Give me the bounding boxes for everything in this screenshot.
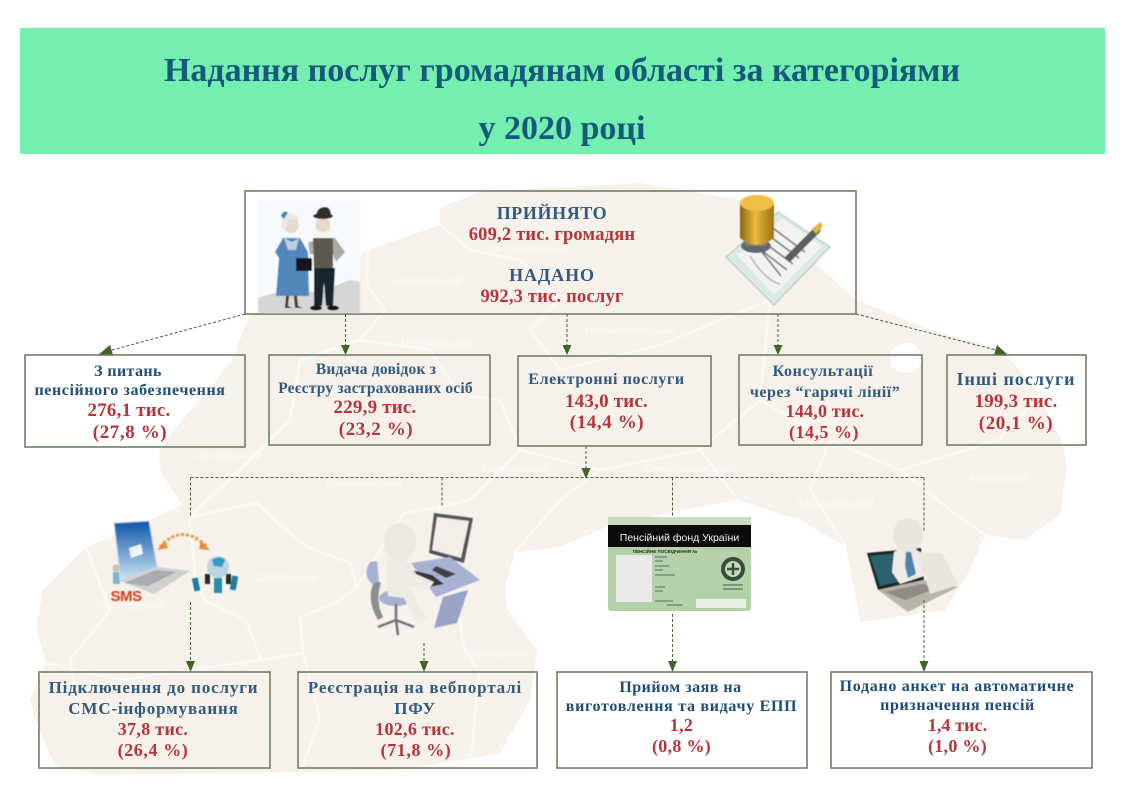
panel: SMS subscription: 37,8 тис. xyxy=(118,719,188,739)
panel: certificates xyxy=(269,355,490,445)
arrow: totals to certificates xyxy=(341,314,350,355)
panel: card applications xyxy=(557,672,807,768)
panel: card applications: (0,8 %) xyxy=(652,736,711,757)
panel: electronic services: (14,4 %) xyxy=(570,412,644,433)
title banner: у 2020 році xyxy=(479,110,645,147)
panel: hotlines xyxy=(739,355,922,445)
heading: accepted: ПРИЙНЯТО xyxy=(497,202,607,223)
panel: card applications: Прийом заяв на xyxy=(619,679,742,696)
arrow: totals to pension questions xyxy=(98,314,245,355)
arrow: totals to hotlines xyxy=(774,314,782,355)
accepted value: 609,2 тис. громадян xyxy=(469,225,635,245)
panel: electronic services: Електронні послуги xyxy=(528,371,685,388)
panel: web portal registration: (71,8 %) xyxy=(381,740,451,761)
panel: pension questions: З питань xyxy=(94,363,162,380)
panel: automatic pension questionnaires: Подано анкет на автоматичне xyxy=(840,678,1074,695)
heading: provided: НАДАНО xyxy=(509,265,595,285)
panel: hotlines: Консультації xyxy=(773,363,873,380)
background map of the region: Софіївський xyxy=(255,572,317,584)
panel: SMS subscription xyxy=(39,672,270,768)
icon: SMS laptop xyxy=(110,521,238,605)
man xyxy=(308,207,345,310)
panel: pension questions xyxy=(25,355,245,447)
panel: card applications: 1,2 xyxy=(670,715,693,735)
panel: hotlines: (14,5 %) xyxy=(789,422,859,443)
panel: certificates: (23,2 %) xyxy=(339,419,413,440)
couple image background xyxy=(247,192,360,313)
panel: other services: (20,1 %) xyxy=(979,413,1053,434)
panel: pension questions: пенсійного забезпечення xyxy=(34,382,226,399)
connector tree xyxy=(190,478,924,532)
panel: SMS subscription: Підключення до послуги xyxy=(49,678,258,697)
icon: pension card: Пенсійний фонд України xyxy=(620,532,739,544)
arrow: electronic services to branches xyxy=(582,446,590,479)
icon: elderly couple xyxy=(258,200,360,313)
background map of the region: Томаківський xyxy=(462,648,528,660)
panel: card applications: виготовлення та видачу ЕПП xyxy=(566,698,797,715)
background map of the region: Новомосковський xyxy=(585,325,675,337)
panel: other services xyxy=(947,355,1086,445)
panel: pension questions: (27,8 %) xyxy=(93,422,167,443)
arrow: to web portal box xyxy=(420,643,428,672)
background map of the region: Солонянський xyxy=(189,450,261,462)
panel: SMS subscription: СМС-інформування xyxy=(68,699,239,718)
panel: other services: Інші послуги xyxy=(956,369,1076,389)
title banner: Надання послуг громадянам області за категоріями xyxy=(164,52,960,89)
panel: automatic pension questionnaires xyxy=(831,672,1092,768)
panel: web portal registration xyxy=(298,672,537,768)
arrow: to SMS box xyxy=(186,602,195,672)
title banner xyxy=(20,28,1105,154)
panel: pension questions: 276,1 тис. xyxy=(88,400,170,421)
panel: web portal registration: Реєстрація на вебпорталі xyxy=(308,678,522,697)
icon: person at computer xyxy=(366,513,480,635)
arrow: totals to electronic services xyxy=(562,314,572,355)
panel: web portal registration: 102,6 тис. xyxy=(375,719,455,739)
background map of the region: Дніпровський xyxy=(480,463,548,475)
panel: other services: 199,3 тис. xyxy=(975,391,1057,412)
panel: automatic pension questionnaires: (1,0 %) xyxy=(928,736,987,757)
panel: hotlines: 144,0 тис. xyxy=(786,401,864,421)
icon: SMS laptop: SMS xyxy=(110,588,142,605)
icon: pension card: ПЕНСІЙНЕ ПОСВІДЧЕННЯ № xyxy=(633,547,697,554)
background map of the region: Петриківський xyxy=(401,338,473,350)
background map of the region: Криворізький xyxy=(97,600,163,612)
icon: pension card xyxy=(608,517,751,611)
panel: certificates: 229,9 тис. xyxy=(334,397,416,418)
panel: automatic pension questionnaires: 1,4 тис. xyxy=(928,715,987,735)
panel: hotlines: через “гарячі лінії” xyxy=(750,384,900,401)
background map of the region: Межівський xyxy=(969,473,1029,485)
icon: person with laptop xyxy=(867,518,958,612)
panel: electronic services xyxy=(518,356,711,446)
background map of the region: Царичанський xyxy=(388,275,462,287)
panel: automatic pension questionnaires: призначення пенсій xyxy=(880,697,1035,714)
woman xyxy=(275,212,312,308)
white inlet between the boxes xyxy=(890,343,922,373)
panel: SMS subscription: (26,4 %) xyxy=(118,740,188,761)
panel: web portal registration: ПФУ xyxy=(394,699,436,718)
icon: stamp and document xyxy=(726,195,830,305)
panel: certificates: Реєстру застрахованих осіб xyxy=(278,380,473,397)
background map of the region: Магдалинівський xyxy=(486,243,572,255)
arrow: to questionnaires box xyxy=(920,600,928,672)
arrow: totals to other services xyxy=(856,314,1008,355)
background map of the region: Синельниківський xyxy=(644,463,736,475)
background map of the region xyxy=(30,183,1067,775)
panel: certificates: Видача довідок з xyxy=(316,361,436,378)
background map of the region: Васильківський xyxy=(796,498,874,510)
panel: totals xyxy=(245,191,856,314)
provided value: 992,3 тис. послуг xyxy=(480,287,624,307)
background map of the region: Криничанський xyxy=(325,478,403,490)
arrow: to card box xyxy=(668,614,677,672)
panel: electronic services: 143,0 тис. xyxy=(565,391,648,412)
